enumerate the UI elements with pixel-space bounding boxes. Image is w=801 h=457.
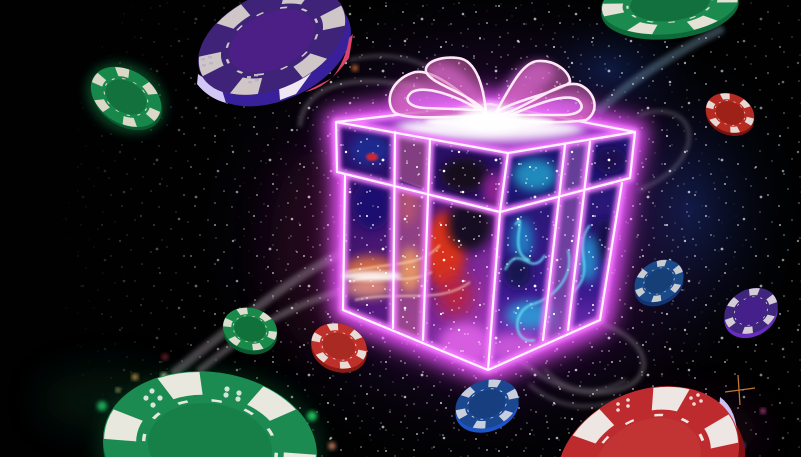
dice pips — [616, 393, 703, 412]
box outer glow — [336, 104, 635, 370]
lid left face — [336, 122, 508, 212]
stars across box — [336, 122, 635, 370]
poker chip: blue right — [627, 251, 691, 315]
orange sparkle — [725, 375, 755, 405]
poker chip: small green left — [73, 48, 179, 148]
orange-white flare on left face — [342, 271, 402, 281]
poker chip: purple right — [716, 279, 786, 347]
ribbon band left — [395, 190, 426, 338]
poker chip: large red bottom — [532, 358, 770, 457]
dice pips — [201, 56, 259, 83]
poker chip: blue bottom — [448, 371, 526, 441]
poker chip: large purple top — [181, 0, 368, 128]
swirling smoke wisps — [175, 30, 720, 406]
poker chip: green top right — [598, 0, 742, 46]
glowing colored bokeh lights — [97, 43, 766, 450]
gift box — [336, 58, 635, 375]
dice pips — [143, 386, 242, 408]
bow glow — [390, 62, 593, 121]
bow — [390, 58, 600, 131]
neon glowing box edges — [336, 104, 635, 370]
lid right face — [500, 132, 635, 212]
poker chip: small red right — [700, 86, 760, 143]
poker chip: green middle — [218, 302, 282, 360]
left body face — [344, 176, 498, 363]
bow sparkle texture — [390, 58, 600, 125]
right body face — [492, 183, 620, 364]
poker chip: large green bottom — [93, 358, 327, 457]
poker chip: red middle — [305, 316, 373, 380]
lid top face — [336, 104, 635, 153]
bow loops — [390, 58, 595, 122]
